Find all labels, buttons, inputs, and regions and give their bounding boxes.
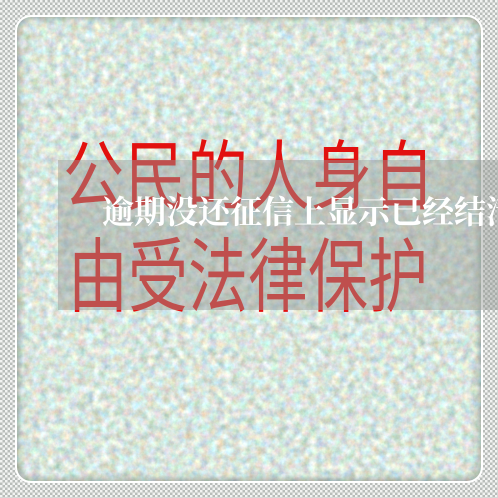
red heading line 2: 由受法律保护 — [68, 234, 428, 323]
red heading line 1: 公民的人身自 — [63, 137, 435, 221]
translucent gray band — [58, 160, 498, 310]
